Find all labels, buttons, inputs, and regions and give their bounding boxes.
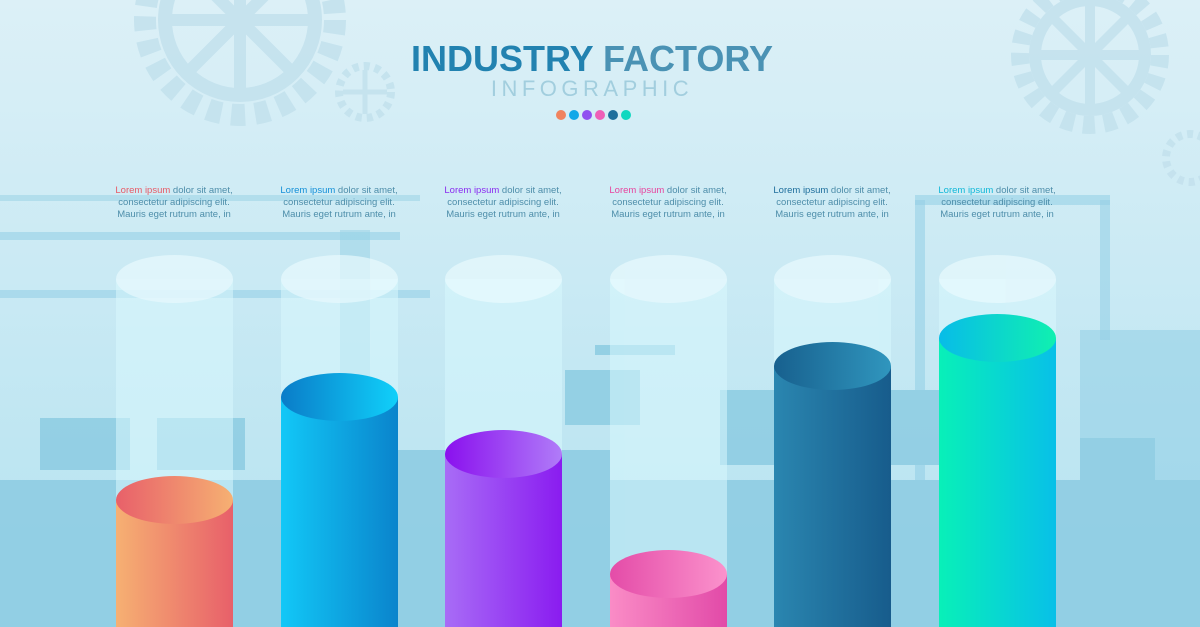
bar 1 orange: [116, 476, 233, 627]
text blocks: Lorem ipsum dolor sit amet,: [609, 185, 727, 196]
text blocks: consectetur adipiscing elit.: [118, 197, 230, 208]
text blocks: Mauris eget rutrum ante, in: [282, 209, 396, 220]
bar 2 blue: [281, 373, 398, 627]
text blocks: Lorem ipsum dolor sit amet,: [938, 185, 1056, 196]
title: INDUSTRY FACTORY: [411, 38, 773, 79]
text blocks: Lorem ipsum dolor sit amet,: [773, 185, 891, 196]
text blocks: consectetur adipiscing elit.: [776, 197, 888, 208]
text blocks: Mauris eget rutrum ante, in: [446, 209, 560, 220]
text blocks: consectetur adipiscing elit.: [941, 197, 1053, 208]
text blocks: Lorem ipsum dolor sit amet,: [280, 185, 398, 196]
text blocks: consectetur adipiscing elit.: [283, 197, 395, 208]
text blocks: Lorem ipsum dolor sit amet,: [444, 185, 562, 196]
text blocks: consectetur adipiscing elit.: [612, 197, 724, 208]
bar 6 green: [939, 314, 1056, 627]
title: [411, 38, 773, 101]
subtitle: INFOGRAPHIC: [491, 76, 693, 101]
bar 5 dark blue: [774, 342, 891, 627]
background factory silhouette: [0, 195, 1200, 627]
color dots: [556, 110, 631, 120]
gears: [145, 0, 1200, 182]
text blocks: Mauris eget rutrum ante, in: [775, 209, 889, 220]
text blocks: Lorem ipsum dolor sit amet,: [115, 185, 233, 196]
text blocks: Mauris eget rutrum ante, in: [117, 209, 231, 220]
bar 3 purple: [445, 430, 562, 627]
text blocks: consectetur adipiscing elit.: [447, 197, 559, 208]
bar 4 pink: [610, 550, 727, 627]
text blocks: [115, 185, 1056, 220]
text blocks: Mauris eget rutrum ante, in: [611, 209, 725, 220]
text blocks: Mauris eget rutrum ante, in: [940, 209, 1054, 220]
glass columns: [116, 255, 1056, 627]
